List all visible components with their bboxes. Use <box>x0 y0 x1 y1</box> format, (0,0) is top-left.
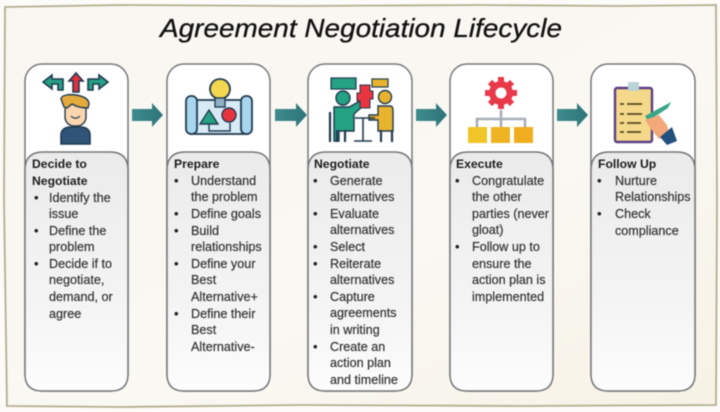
panel: prepare <box>167 64 270 391</box>
text: follow up: Follow Up <box>598 157 656 171</box>
text: execute: implemented <box>472 290 544 304</box>
text: negotiate: Reiterate <box>330 257 381 271</box>
arrow 3 <box>416 103 447 127</box>
text: prepare: Understand <box>191 174 256 188</box>
text: negotiate: • <box>313 339 318 354</box>
text: prepare: • <box>174 206 179 221</box>
text: negotiate: alternatives <box>330 223 394 237</box>
card: prepare <box>167 64 270 391</box>
text: execute: ensure the <box>472 257 532 271</box>
text: negotiate: • <box>313 206 318 221</box>
detail panel: decide to negotiate <box>25 152 128 391</box>
text: prepare: Alternative- <box>191 340 255 354</box>
text: follow up: Nurture <box>615 174 657 188</box>
text: prepare: Define their <box>191 307 255 321</box>
text: follow up: Relationships <box>615 190 691 204</box>
text: negotiate: • <box>313 289 318 304</box>
text: prepare: Define your <box>191 257 255 271</box>
text: prepare: • <box>174 256 179 271</box>
text: prepare: • <box>174 306 179 321</box>
text: negotiate: Generate <box>330 174 383 188</box>
card: decide to negotiate <box>25 64 128 391</box>
text: negotiate: Negotiate <box>314 157 370 171</box>
text: negotiate <box>313 157 398 387</box>
text: follow up: • <box>597 206 602 221</box>
text: negotiate: in writing <box>330 323 380 337</box>
text: negotiate: agreements <box>330 306 397 320</box>
icon: people negotiating at table <box>330 78 393 142</box>
card: negotiate <box>308 64 412 391</box>
text: decide to negotiate: Identify the <box>49 191 111 205</box>
text: execute: parties (never <box>472 207 549 221</box>
text: negotiate: • <box>313 173 318 188</box>
text: decide to negotiate: agree <box>49 307 81 321</box>
arrow 2 <box>275 103 307 127</box>
text: negotiate: • <box>313 256 318 271</box>
text: prepare: Alternative+ <box>191 290 258 304</box>
text: prepare: Best <box>191 273 217 287</box>
text: decide to negotiate: issue <box>49 207 78 221</box>
text: decide to negotiate: problem <box>49 240 94 254</box>
text: negotiate: alternatives <box>330 273 394 287</box>
text: decide to negotiate: Decide if to <box>49 257 112 271</box>
text: follow up: • <box>597 173 602 188</box>
detail panel: prepare <box>167 152 270 391</box>
text: decide to negotiate <box>32 157 113 321</box>
detail panel: execute <box>450 152 553 391</box>
text: decide to negotiate: Define the <box>49 224 106 238</box>
detail panel: negotiate <box>308 152 412 391</box>
icon: gear with org chart <box>468 77 533 143</box>
panel: execute <box>450 64 553 391</box>
text: follow up: compliance <box>615 224 679 238</box>
text: prepare: Prepare <box>174 157 220 171</box>
text: prepare: • <box>174 223 179 238</box>
text: prepare: • <box>174 173 179 188</box>
text: execute: Execute <box>456 157 503 171</box>
icon: blueprint with light bulb <box>186 79 252 134</box>
text: decide to negotiate: • <box>34 256 39 271</box>
text: prepare: Best <box>191 323 217 337</box>
title: Agreement Negotiation Lifecycle <box>158 13 562 43</box>
text: negotiate: Create an <box>330 340 385 354</box>
text: execute: gloat) <box>472 223 504 237</box>
text: execute: • <box>455 173 460 188</box>
text: decide to negotiate: Decide to <box>32 157 87 171</box>
text: follow up <box>597 157 691 238</box>
text: prepare: relationships <box>191 240 262 254</box>
text: negotiate: action plan <box>330 356 391 370</box>
text: execute <box>455 157 549 304</box>
text: decide to negotiate: • <box>34 223 39 238</box>
text: negotiate: Evaluate <box>330 207 379 221</box>
text: decide to negotiate: demand, or <box>49 290 113 304</box>
panel: negotiate <box>308 64 412 391</box>
text: execute: action plan is <box>472 273 546 287</box>
text: follow up: Check <box>615 207 651 221</box>
text: execute: the other <box>472 190 522 204</box>
detail panel: follow up <box>591 152 695 391</box>
icon: clipboard checklist with hand <box>615 82 677 145</box>
text: decide to negotiate: • <box>34 190 39 205</box>
panel: follow up <box>591 64 695 391</box>
text: execute: Follow up to <box>472 240 540 254</box>
text: negotiate: and timeline <box>330 373 398 387</box>
text: prepare: Define goals <box>191 207 261 221</box>
text: prepare: the problem <box>191 190 258 204</box>
text: decide to negotiate: Negotiate <box>32 174 88 188</box>
card: execute <box>450 64 553 391</box>
text: execute: • <box>455 239 460 254</box>
text: negotiate: • <box>313 239 318 254</box>
panel: decide to negotiate <box>25 64 128 391</box>
text: negotiate: Capture <box>330 290 375 304</box>
arrow 4 <box>557 103 588 127</box>
icon: person choosing direction <box>43 73 108 144</box>
text: execute: Congratulate <box>472 174 544 188</box>
card: follow up <box>591 64 695 391</box>
text: decide to negotiate: negotiate, <box>49 273 104 287</box>
arrow 1 <box>132 103 163 127</box>
text: negotiate: alternatives <box>330 190 394 204</box>
text: negotiate: Select <box>330 240 366 254</box>
text: prepare: Build <box>191 224 219 238</box>
text: prepare <box>174 157 262 354</box>
